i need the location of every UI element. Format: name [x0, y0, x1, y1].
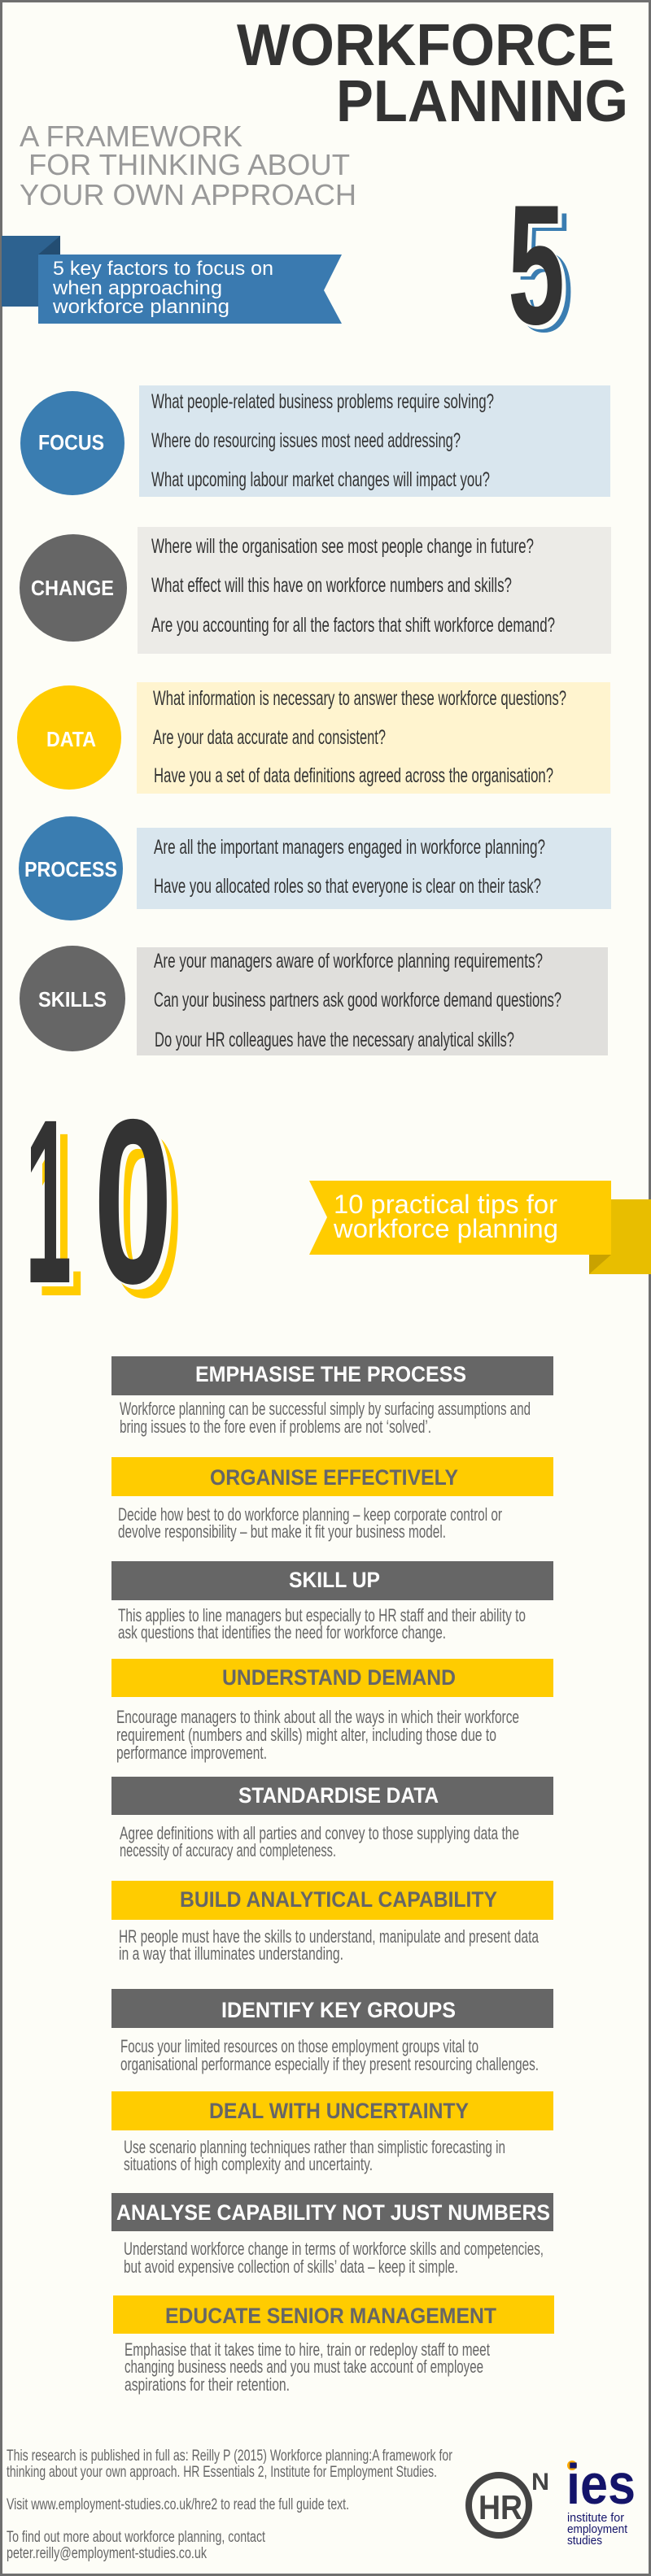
logo: ies: ies [566, 2452, 636, 2516]
tip 6: build analytical capability: in a way that illuminates understanding. [119, 1943, 343, 1964]
big number 10: 0 [98, 1076, 177, 1338]
tip 1: emphasise the process: bring issues to the fore even if problems are not ‘solved’. [120, 1416, 431, 1437]
tip 2: organise effectively: ORGANISE EFFECTIVELY [210, 1465, 458, 1490]
logo: ies: employment [567, 2522, 628, 2536]
tip 8: deal with uncertainty: DEAL WITH UNCERTAINTY [209, 2099, 469, 2123]
tip 2: organise effectively [111, 1457, 553, 1542]
banner: 10 practical tips [309, 1181, 651, 1274]
tip 4: understand demand: requirement (numbers and skills) might alter, including those due to [116, 1725, 496, 1745]
factor: CHANGE: CHANGE [31, 576, 114, 600]
banner: 5 key factors: 5 key factors to focus on [53, 258, 273, 280]
tip 10: educate senior management: changing business needs and you must take account of employee [125, 2356, 483, 2377]
logo: HRN: HR [478, 2488, 522, 2526]
factor: CHANGE [20, 527, 611, 654]
tip 10: educate senior management: aspirations for their retention. [125, 2374, 290, 2395]
factor: FOCUS: Where do resourcing issues most need addressing? [151, 429, 461, 452]
banner: 5 key factors: when approaching [52, 277, 222, 299]
tip 9: analyse capability: ANALYSE CAPABILITY NOT JUST NUMBERS [116, 2200, 550, 2225]
tip 4: understand demand: UNDERSTAND DEMAND [222, 1665, 456, 1690]
tip 6: build analytical capability [111, 1881, 553, 1964]
factor: PROCESS: PROCESS [24, 857, 117, 881]
tip 4: understand demand: performance improvement. [116, 1743, 267, 1763]
tip 7: identify key groups [111, 1989, 553, 2074]
factor: DATA: DATA [46, 727, 96, 751]
title [237, 13, 628, 134]
footer text: thinking about your own approach. HR Essentials 2, Institute for Employment Studies. [7, 2464, 437, 2481]
big number 5: 5 [508, 169, 565, 360]
tip 7: identify key groups: IDENTIFY KEY GROUPS [221, 1998, 456, 2022]
subtitle [20, 120, 356, 211]
factor: SKILLS [20, 946, 608, 1055]
tip 8: deal with uncertainty: situations of high complexity and uncertainty. [124, 2154, 373, 2174]
big number 5: 5 [515, 176, 574, 368]
tip 9: analyse capability [111, 2193, 553, 2277]
footer text [7, 2448, 452, 2562]
tip 6: build analytical capability: BUILD ANALYTICAL CAPABILITY [180, 1887, 497, 1912]
tip 5: standardise data: necessity of accuracy and completeness. [120, 1840, 336, 1860]
tip 10: educate senior management: EDUCATE SENIOR MANAGEMENT [165, 2304, 496, 2328]
big number 10: 1 [37, 1084, 83, 1346]
banner: 5 key factors: workforce planning [52, 296, 229, 318]
footer text: This research is published in full as: Reilly P (2015) Workforce planning:A framework for [7, 2448, 452, 2465]
tip 1: emphasise the process [111, 1356, 553, 1437]
big number 10: 1 [25, 1071, 72, 1333]
tip 8: deal with uncertainty [111, 2091, 553, 2174]
big number 10: 1 [29, 1075, 76, 1337]
footer text: peter.reilly@employment-studies.co.uk [7, 2545, 207, 2562]
factor: PROCESS [19, 816, 611, 920]
factor: DATA: Are your data accurate and consistent? [153, 726, 386, 749]
logo: HRN: N [531, 2469, 549, 2496]
subtitle: YOUR OWN APPROACH [20, 178, 356, 211]
footer text: To find out more about workforce planning, contact [7, 2529, 266, 2546]
tip 10: educate senior management: Emphasise that it takes time to hire, train or redeploy staff to meet [125, 2339, 490, 2360]
tip 3: skill up [111, 1561, 553, 1643]
subtitle: A FRAMEWORK [20, 120, 242, 153]
logo: ies: institute for [567, 2511, 624, 2525]
tip 3: skill up: ask questions that identifies the need for workforce change. [118, 1622, 446, 1643]
title: WORKFORCE [237, 13, 614, 78]
big number 10: 0 [105, 1085, 184, 1347]
tip 9: analyse capability: but avoid expensive collection of skills’ data – keep it simple. [124, 2256, 458, 2277]
big number 5: 5 [512, 173, 569, 364]
tip 2: organise effectively: devolve responsibility – but make it fit your business model. [118, 1521, 446, 1542]
tip 3: skill up: SKILL UP [289, 1568, 380, 1592]
factor: FOCUS: What upcoming labour market changes will impact you? [151, 468, 490, 491]
banner: 10 practical tips: 10 practical tips for [334, 1190, 557, 1219]
big number 10: 0 [94, 1071, 173, 1333]
banner: 5 key factors [2, 236, 342, 324]
logo: HRN [469, 2469, 549, 2535]
tip 10: educate senior management [113, 2295, 554, 2395]
factor: SKILLS: SKILLS [38, 987, 107, 1012]
factor: DATA [17, 682, 610, 794]
footer text: Visit www.employment-studies.co.uk/hre2 to read the full guide text. [7, 2496, 349, 2513]
factor: FOCUS: FOCUS [38, 430, 104, 455]
title: PLANNING [336, 69, 628, 134]
tip 1: emphasise the process: EMPHASISE THE PROCESS [195, 1362, 466, 1386]
factor: FOCUS [20, 385, 610, 497]
tip 7: identify key groups: Focus your limited resources on those employment groups vital to [120, 2036, 478, 2056]
big number 5 [508, 169, 574, 368]
tip 5: standardise data: STANDARDISE DATA [238, 1783, 439, 1808]
banner: 10 practical tips: workforce planning [333, 1214, 558, 1243]
factor: FOCUS: What people-related business problems require solving? [151, 390, 494, 413]
logo: ies [566, 2452, 636, 2548]
tip 5: standardise data [111, 1777, 553, 1860]
subtitle: FOR THINKING ABOUT [28, 148, 350, 181]
logo: ies: studies [567, 2534, 602, 2548]
tip 4: understand demand [111, 1659, 553, 1763]
